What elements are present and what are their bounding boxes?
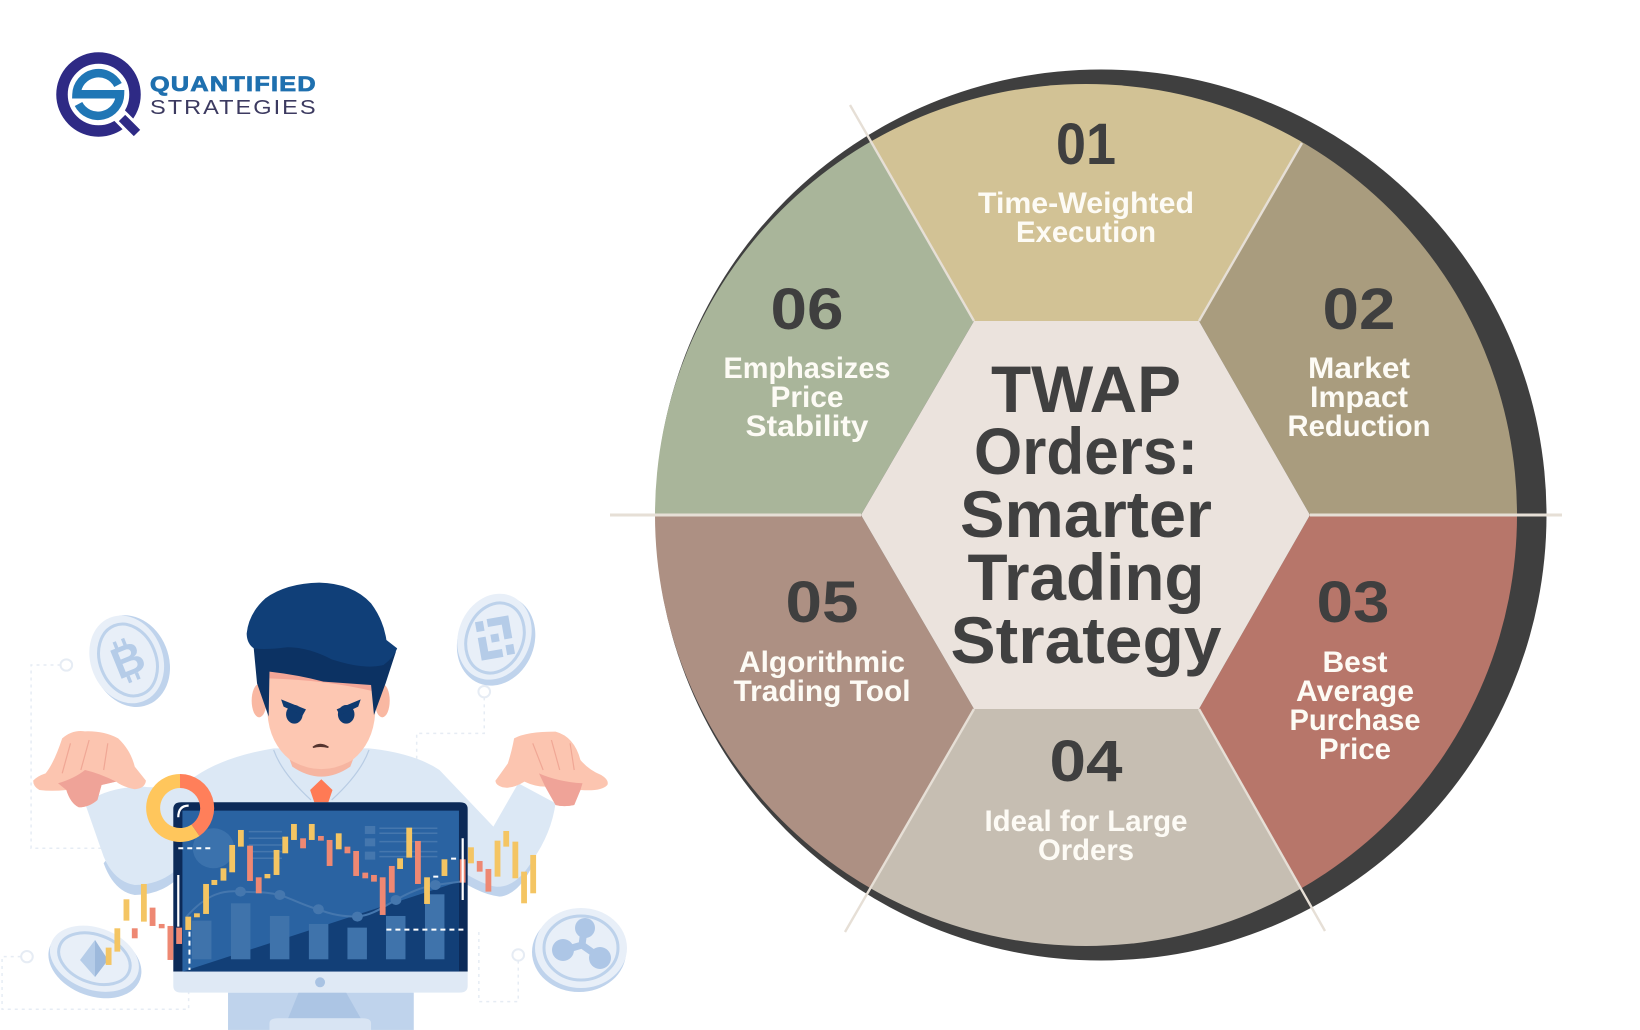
label 02: 02 [1322,277,1396,342]
label 01: Execution [1016,216,1156,249]
spokes [610,105,1562,932]
center title: TWAP [991,352,1181,426]
label 05 [734,570,910,708]
monitor stand [228,993,414,1030]
wheel sectors [655,84,1517,946]
label 02: Reduction [1288,410,1430,443]
label 03: Average [1296,675,1414,708]
label 02: Impact [1310,381,1408,414]
icon: ethereum coin [39,914,152,1011]
white screen marks [178,806,464,970]
logo wordmark [150,72,316,119]
eyes, brows and mouth [281,699,361,747]
wheel diagram [610,70,1562,960]
label 04 [984,729,1188,867]
label 04: Ideal for Large [984,805,1188,838]
monitor [173,802,468,993]
label 06: Stability [746,410,869,443]
label 06: Emphasizes [724,352,890,385]
volume bars [192,894,444,959]
center title: Orders: [974,414,1198,488]
sector 06 [655,142,974,515]
dotted connector lines [2,659,524,1009]
label 03 [1290,570,1420,766]
label 03: Purchase [1290,704,1420,737]
figure and monitor [33,583,608,1030]
label 05: 05 [786,570,858,635]
red candles [132,836,491,960]
label 03: Price [1319,733,1391,766]
sector 02 [1199,142,1517,515]
hair [247,583,397,717]
label 06: Price [770,381,844,414]
neck and face [252,670,390,777]
label 04: Orders [1038,834,1134,867]
center title [950,352,1222,677]
dark offset ring [656,70,1546,960]
icon: bitcoin coin [76,602,183,719]
icon: bitcoin coin: B [104,632,152,689]
label 01: Time-Weighted [978,187,1194,220]
label 03: 03 [1316,570,1390,635]
icon: binance coin [443,582,549,697]
label 04: 04 [1050,729,1122,794]
icon: magnifier with S [62,58,137,133]
label 02: Market [1308,352,1410,385]
shirt and sleeves [85,748,556,897]
center title: Trading [968,540,1204,614]
sector 04 [871,709,1300,946]
label 06 [724,277,890,443]
logo wordmark: QUANTIFIED [150,72,316,96]
logo: Quantified Strategies [62,58,316,133]
center title: Smarter [960,477,1212,551]
tie [310,779,333,802]
center title: Strategy [950,603,1222,677]
label 02 [1288,277,1430,443]
label 05: Algorithmic [739,646,905,679]
label 01 [978,112,1194,249]
label 06: 06 [770,277,844,342]
trend line [187,880,460,922]
sector 01 [872,84,1302,321]
label 05: Trading Tool [734,675,910,708]
hands [33,731,608,807]
donut chart icon [153,781,207,835]
yellow candles [106,824,536,965]
sector 05 [655,515,974,888]
illustration: trader with monitor and crypto coins [2,582,627,1030]
screen details [193,826,437,868]
label 01: 01 [1056,112,1116,177]
icon: ripple coin [532,908,627,992]
sector 03 [1199,515,1517,888]
label 03: Best [1322,646,1388,679]
logo wordmark: STRATEGIES [150,95,316,119]
center hexagon [861,321,1310,709]
